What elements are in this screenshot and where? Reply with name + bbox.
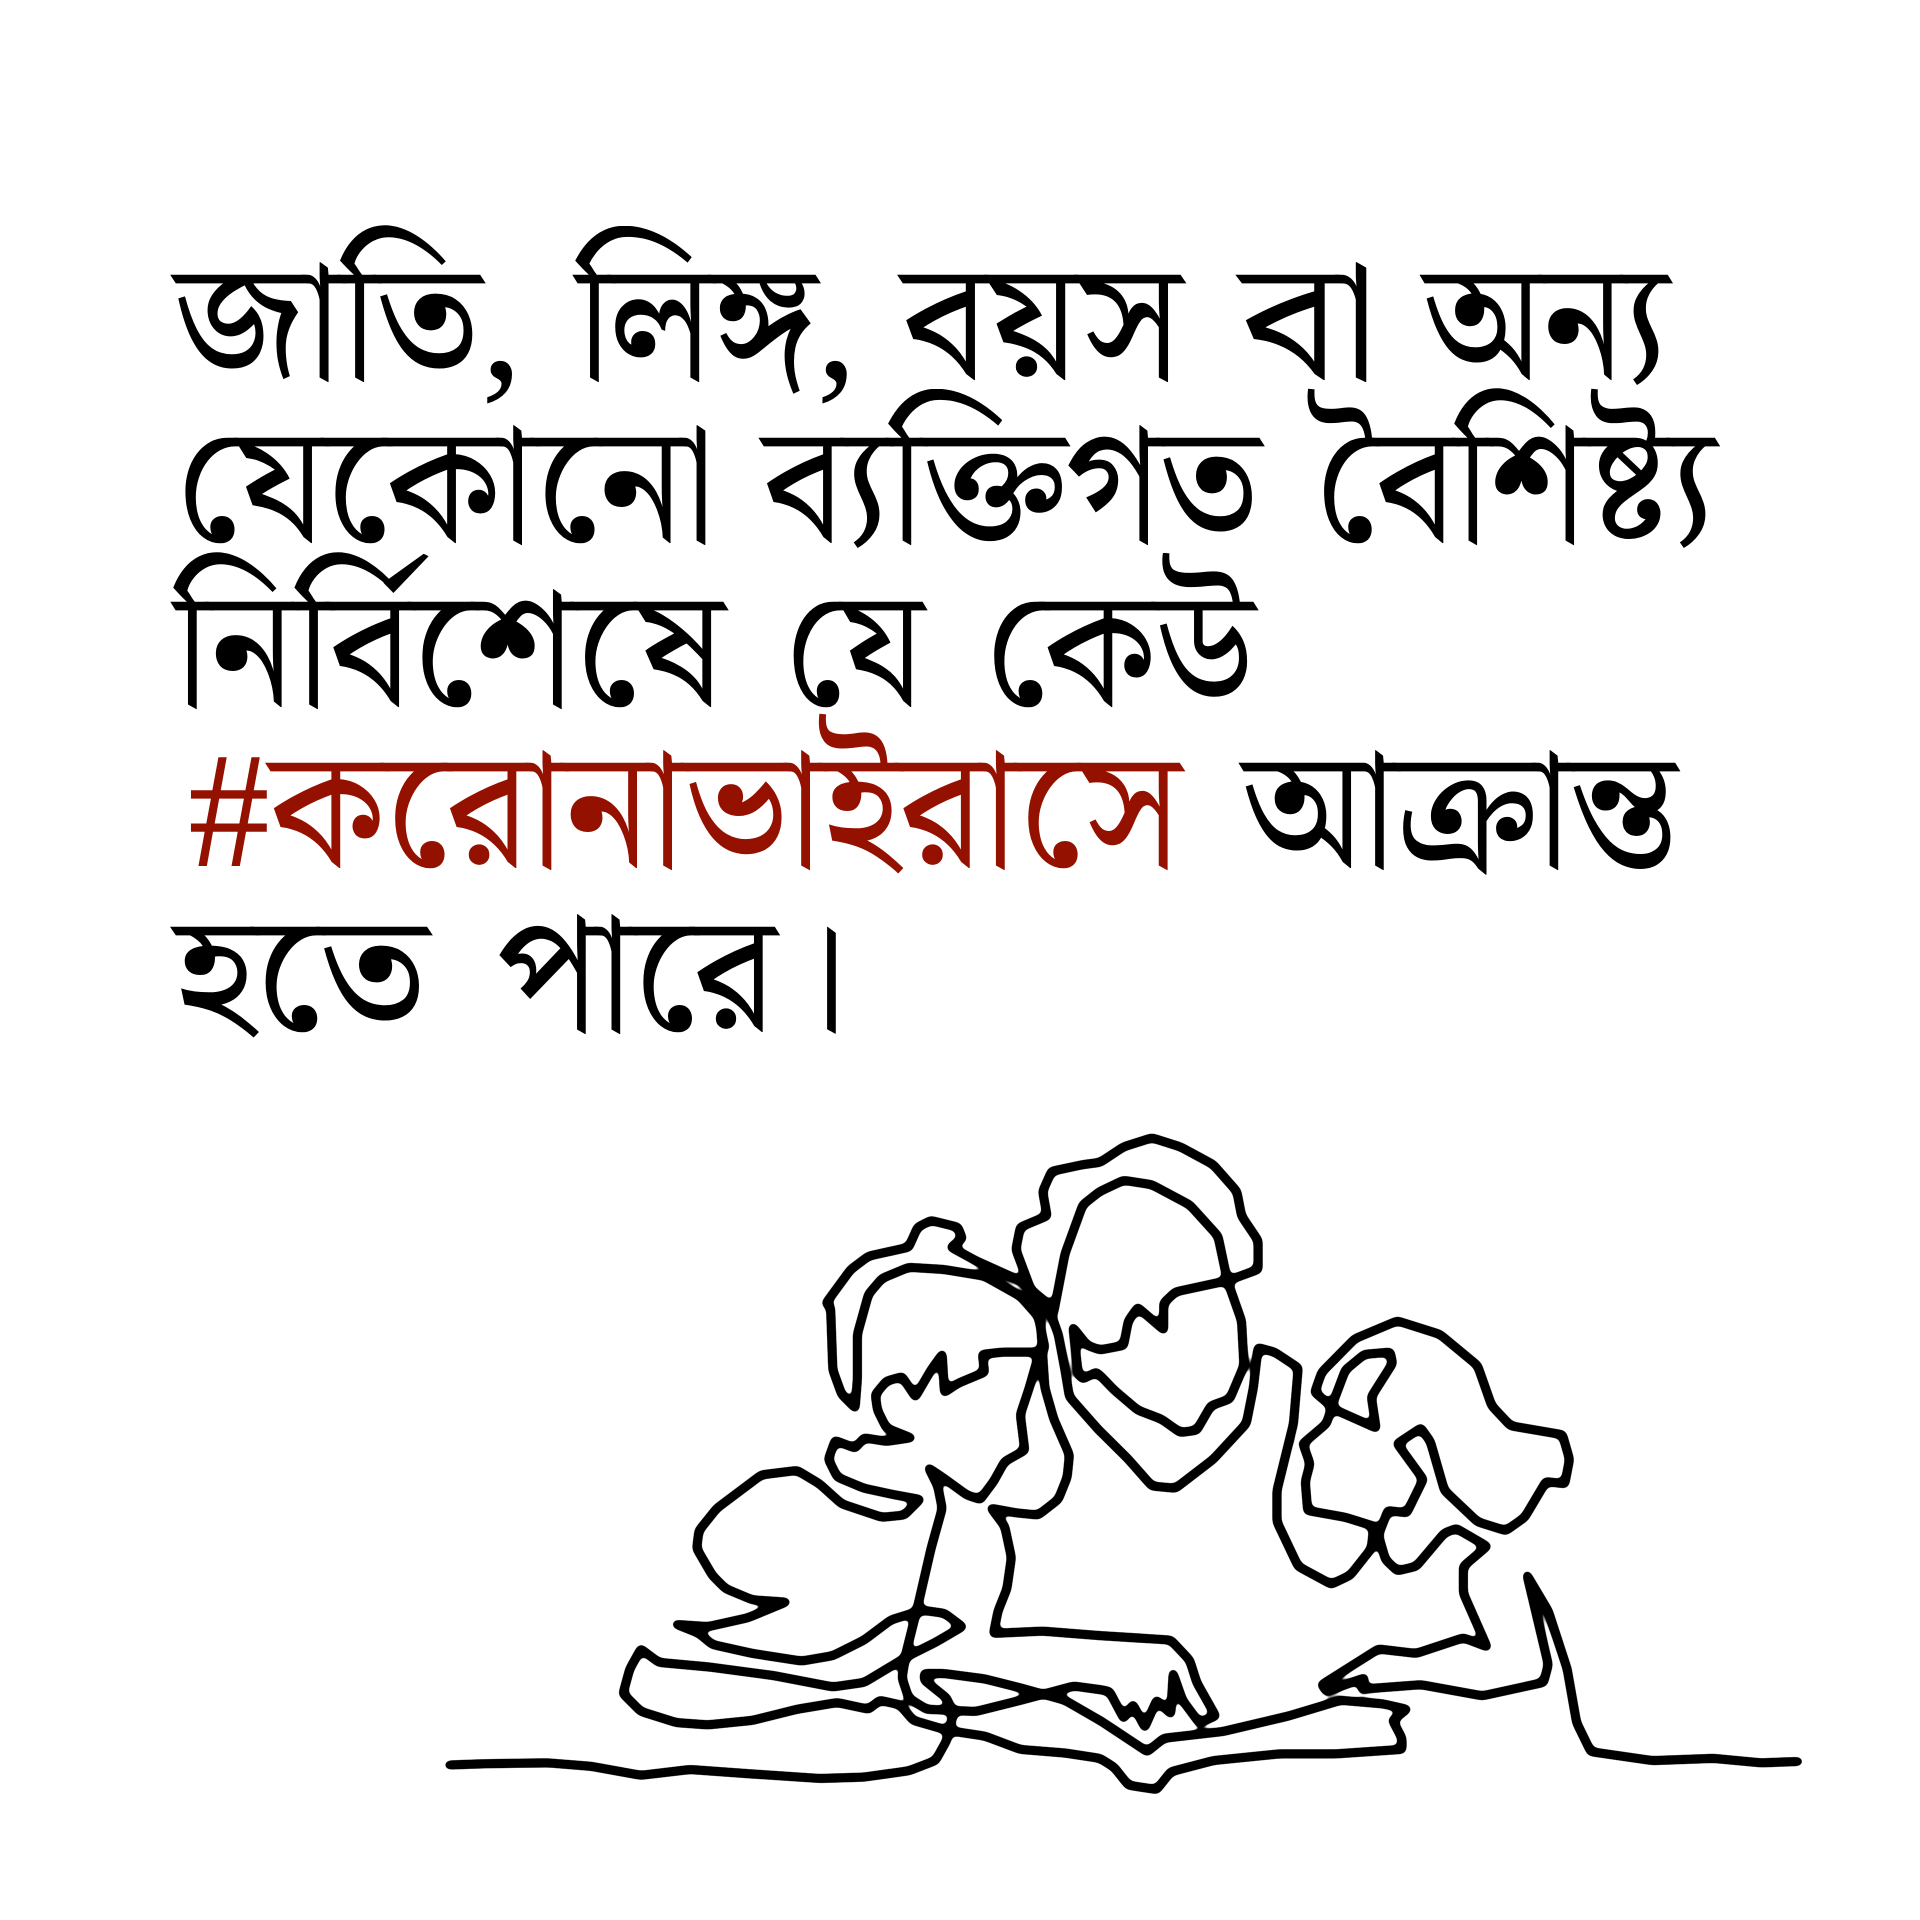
- line 3: [170, 552, 1259, 741]
- line 5: [170, 882, 850, 1066]
- line 1: অন্য: [1424, 230, 1669, 414]
- line 5: হতে: [175, 882, 428, 1066]
- line 3: নির্বিশেষে: [175, 557, 724, 741]
- line 5: পারে।: [497, 882, 850, 1066]
- line 1: বয়স: [902, 230, 1182, 414]
- line 2: যেকোনো: [175, 393, 715, 577]
- line 4 with red hashtag: #করোনাভাইরাসে: [188, 718, 1181, 902]
- line 2: ব্যক্তিগত: [763, 393, 1260, 577]
- line 2: বৈশিষ্ট্য: [1314, 393, 1716, 577]
- line 1: জাতি,: [175, 230, 522, 414]
- line 1: বা: [1241, 230, 1378, 414]
- line 4 with red hashtag: আক্রান্ত: [1243, 718, 1676, 902]
- headline text: [170, 225, 1720, 1066]
- line 1: [170, 225, 1673, 414]
- line 3: যে: [784, 557, 923, 741]
- line 1: লিঙ্গ,: [577, 230, 857, 414]
- line 3: কেউ: [984, 557, 1254, 741]
- line 4 with red hashtag: [188, 714, 1680, 902]
- line 2: [175, 388, 1720, 577]
